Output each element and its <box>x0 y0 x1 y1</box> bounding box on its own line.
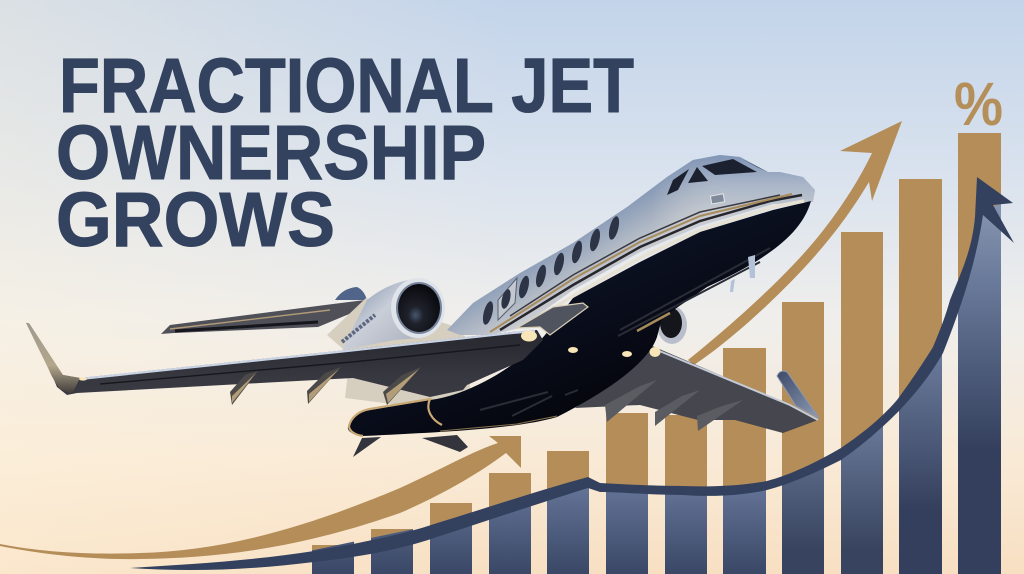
cabin windows <box>481 215 621 326</box>
near wing flap fairings <box>230 367 421 405</box>
title: GROWS <box>56 177 335 263</box>
rear fuselage <box>327 298 470 405</box>
cockpit windows <box>667 159 768 195</box>
flap fairing highlights <box>232 369 419 403</box>
near wing <box>50 330 543 397</box>
far wing flap fairings <box>605 380 743 431</box>
tail fin <box>335 287 367 300</box>
fuselage silver upper <box>447 155 815 335</box>
bar chart: rising gold and navy bars <box>312 133 1001 574</box>
percent symbol: % <box>954 70 1003 138</box>
belly slits <box>480 248 770 416</box>
far engine <box>657 306 687 344</box>
engine nacelle <box>342 278 445 350</box>
gold bars <box>312 133 1001 574</box>
title: OWNERSHIP <box>56 110 486 196</box>
belly highlight <box>637 313 670 331</box>
far winglet <box>777 371 819 418</box>
private jet <box>26 155 819 457</box>
nose hatch <box>710 194 725 204</box>
nose section <box>688 155 815 225</box>
title <box>56 43 634 263</box>
navy bar portions below the curve <box>312 180 1001 574</box>
near winglet <box>26 323 80 394</box>
wing and belly lights <box>79 330 660 381</box>
gold growth arrow <box>0 121 902 559</box>
far wing <box>575 345 818 433</box>
gear doors <box>730 255 755 292</box>
engine lettering strip <box>342 315 375 342</box>
cabin door <box>498 278 517 320</box>
navy growth arrow <box>130 177 1014 570</box>
title: FRACTIONAL JET <box>59 43 634 129</box>
belly pod with gold rim <box>349 399 557 436</box>
wing root fairing <box>517 303 588 335</box>
fuselage black belly <box>348 201 811 436</box>
horizontal stabilizer <box>161 300 365 334</box>
landing gear fins <box>353 435 468 457</box>
cheatline stripes <box>490 194 804 332</box>
